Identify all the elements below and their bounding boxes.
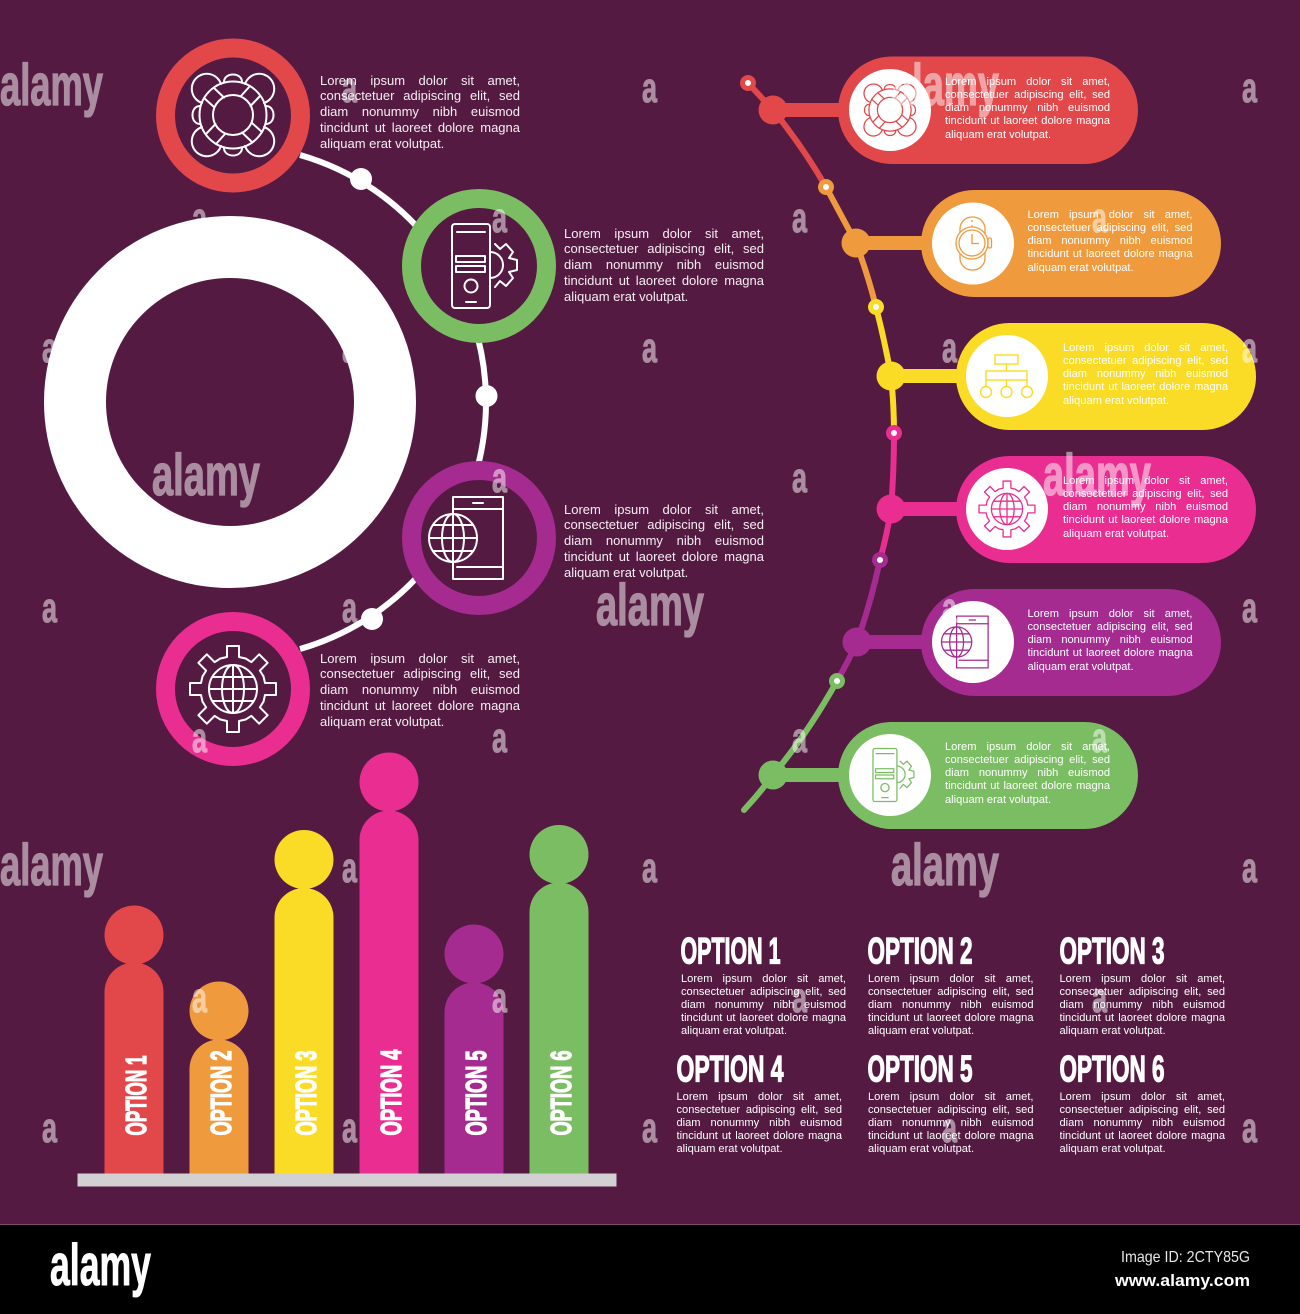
pill: pink: tincidunt ut laoreet dolore magna <box>1063 514 1228 526</box>
node: green computer ring <box>412 198 546 334</box>
pill: purple: tincidunt ut laoreet dolore magna <box>1028 647 1192 659</box>
option 4: OPTION 4 <box>676 1048 784 1090</box>
option 5: diam nonummy nibh euismod <box>868 1117 1034 1129</box>
text block: purple node: consectetuer adipiscing elit, sed <box>564 517 764 532</box>
bar: option 6: OPTION 6 <box>546 1050 578 1136</box>
option 3: Lorem ipsum dolor sit amet, <box>1060 972 1225 984</box>
pill: green: tincidunt ut laoreet dolore magna <box>945 780 1110 792</box>
icon: wristwatch <box>956 217 992 270</box>
pill: purple: diam nonummy nibh euismod <box>1028 634 1192 646</box>
watermark overlay: a <box>792 194 807 241</box>
website: www.alamy.com <box>1114 1271 1250 1290</box>
watermark overlay: a <box>342 844 357 891</box>
watermark overlay: a <box>942 1104 957 1151</box>
option 3: aliquam erat volutpat. <box>1060 1025 1166 1037</box>
watermark overlay: a <box>792 714 807 761</box>
option 6: aliquam erat volutpat. <box>1060 1143 1166 1155</box>
option 1: aliquam erat volutpat. <box>681 1025 787 1037</box>
pill: yellow: diam nonummy nibh euismod <box>1063 368 1228 380</box>
watermark overlay: alamy <box>1043 443 1151 508</box>
option 5: aliquam erat volutpat. <box>868 1143 974 1155</box>
watermark overlay: a <box>342 584 357 631</box>
text block: purple node: tincidunt ut laoreet dolore magna <box>564 549 764 564</box>
watermark overlay: a <box>192 974 207 1021</box>
option 1 <box>680 930 846 1040</box>
pill: orange: consectetuer adipiscing elit, sed <box>1028 222 1192 234</box>
option 1: consectetuer adipiscing elit, sed <box>681 986 846 998</box>
watermark overlay: alamy <box>152 443 260 508</box>
pill: green: aliquam erat volutpat. <box>945 794 1051 806</box>
watermark overlay: a <box>192 194 207 241</box>
watermark overlay: a <box>492 194 507 241</box>
text block: pink node: consectetuer adipiscing elit, sed <box>320 666 520 681</box>
watermark overlay: a <box>192 714 207 761</box>
pill: pink: Lorem ipsum dolor sit amet, <box>1063 474 1228 486</box>
footer logo: alamy <box>50 1233 151 1298</box>
bar: option 1: OPTION 1 <box>121 1056 153 1136</box>
pill: green: consectetuer adipiscing elit, sed <box>945 754 1110 766</box>
watermark overlay: a <box>1092 194 1107 241</box>
option 1: Lorem ipsum dolor sit amet, <box>681 972 846 984</box>
connector arc with dots <box>300 155 498 649</box>
watermark overlay: a <box>492 454 507 501</box>
watermark overlay: a <box>492 714 507 761</box>
text block: purple node: aliquam erat volutpat. <box>564 564 688 580</box>
large white ring <box>75 247 385 557</box>
watermark overlay: a <box>1242 324 1257 371</box>
pill: orange <box>842 190 1221 297</box>
text block: red node: tincidunt ut laoreet dolore magna <box>320 120 520 135</box>
pill: red: consectetuer adipiscing elit, sed <box>945 89 1110 101</box>
option 5: tincidunt ut laoreet dolore magna <box>868 1130 1034 1142</box>
option 3: diam nonummy nibh euismod <box>1060 999 1225 1011</box>
pill: red: aliquam erat volutpat. <box>945 129 1051 141</box>
watermark overlay: a <box>1242 64 1257 111</box>
pill: yellow: aliquam erat volutpat. <box>1063 395 1169 407</box>
watermark overlay: a <box>1242 584 1257 631</box>
pill: green <box>758 722 1138 829</box>
option 2: tincidunt ut laoreet dolore magna <box>868 1012 1034 1024</box>
watermark overlay: alamy <box>0 53 103 118</box>
watermark overlay: a <box>42 1104 57 1151</box>
text block: red node: consectetuer adipiscing elit, sed <box>320 88 520 103</box>
watermark overlay: a <box>42 584 57 631</box>
option 2: Lorem ipsum dolor sit amet, <box>868 972 1034 984</box>
option 5: Lorem ipsum dolor sit amet, <box>868 1090 1034 1102</box>
pill: purple <box>842 589 1221 696</box>
node: pink gear globe ring <box>166 622 300 756</box>
panel: curved timeline with pills <box>742 56 1256 829</box>
watermark overlay: a <box>942 584 957 631</box>
text block: pink node: tincidunt ut laoreet dolore magna <box>320 698 520 713</box>
pill: yellow: tincidunt ut laoreet dolore magna <box>1063 381 1228 393</box>
watermark overlay: a <box>492 974 507 1021</box>
text block: green node: tincidunt ut laoreet dolore magna <box>564 273 764 288</box>
node: purple phone globe ring <box>412 470 546 606</box>
pill: purple: aliquam erat volutpat. <box>1028 661 1134 673</box>
pill: green: diam nonummy nibh euismod <box>945 767 1110 779</box>
option 3: OPTION 3 <box>1060 930 1164 972</box>
bar: option 2 <box>190 982 248 1174</box>
bar: option 3 <box>274 830 334 1174</box>
text block: red node <box>320 72 520 152</box>
text block: green node: diam nonummy nibh euismod <box>564 257 764 272</box>
pill: orange: diam nonummy nibh euismod <box>1028 235 1192 247</box>
timeline spine <box>744 83 894 810</box>
option 2: diam nonummy nibh euismod <box>868 999 1034 1011</box>
text block: red node: diam nonummy nibh euismod <box>320 104 520 119</box>
watermark overlay: alamy <box>891 53 999 118</box>
watermark overlay: a <box>642 64 657 111</box>
text block: green node: aliquam erat volutpat. <box>564 288 688 304</box>
text block: red node: aliquam erat volutpat. <box>320 136 444 150</box>
bar chart <box>78 752 616 1186</box>
bar: option 5: OPTION 5 <box>461 1050 493 1136</box>
watermark overlay: a <box>642 324 657 371</box>
bar: option 4 <box>360 752 418 1174</box>
watermark overlay: a <box>1242 1104 1257 1151</box>
option 6 <box>1060 1048 1225 1158</box>
option 5 <box>868 1048 1034 1158</box>
pill: pink: consectetuer adipiscing elit, sed <box>1063 488 1228 500</box>
option 5: consectetuer adipiscing elit, sed <box>868 1104 1034 1116</box>
pill: yellow: Lorem ipsum dolor sit amet, <box>1063 342 1228 354</box>
bar: option 4: OPTION 4 <box>376 1050 408 1136</box>
watermark overlay: a <box>792 454 807 501</box>
option 6: OPTION 6 <box>1060 1048 1164 1090</box>
option 4: tincidunt ut laoreet dolore magna <box>676 1130 842 1142</box>
watermark overlay: a <box>1242 844 1257 891</box>
watermark overlay: a <box>1092 714 1107 761</box>
watermark overlay: a <box>642 844 657 891</box>
pill: yellow <box>876 323 1256 430</box>
watermark overlay: alamy <box>891 833 999 898</box>
pill: purple: Lorem ipsum dolor sit amet, <box>1028 608 1192 620</box>
option 1: diam nonummy nibh euismod <box>681 999 846 1011</box>
pill: purple: consectetuer adipiscing elit, sed <box>1028 621 1192 633</box>
option 4: Lorem ipsum dolor sit amet, <box>676 1090 842 1102</box>
option 4: diam nonummy nibh euismod <box>676 1117 842 1129</box>
watermark overlay: alamy <box>596 573 704 638</box>
option 2 <box>868 930 1034 1040</box>
pill: red: Lorem ipsum dolor sit amet, <box>945 76 1110 88</box>
option 5: OPTION 5 <box>868 1048 972 1090</box>
option 2: OPTION 2 <box>868 930 972 972</box>
pill: orange: aliquam erat volutpat. <box>1028 262 1134 274</box>
bar: option 5 <box>444 924 504 1174</box>
image id: Image ID: 2CTY85G <box>1121 1249 1250 1266</box>
option 4: aliquam erat volutpat. <box>676 1143 783 1155</box>
text block: pink node: diam nonummy nibh euismod <box>320 682 520 697</box>
text block: purple node: Lorem ipsum dolor sit amet, <box>564 502 764 516</box>
option 4 <box>676 1048 842 1158</box>
text block: purple node <box>564 502 764 582</box>
panel: circular process diagram <box>75 48 764 756</box>
bar: option 1 <box>104 906 164 1174</box>
text block: green node <box>564 226 764 306</box>
pill: orange: Lorem ipsum dolor sit amet, <box>1028 208 1192 220</box>
text block: red node: Lorem ipsum dolor sit amet, <box>320 72 520 88</box>
bar: option 2: OPTION 2 <box>206 1050 238 1136</box>
text block: pink node <box>320 650 520 730</box>
text block: pink node: Lorem ipsum dolor sit amet, <box>320 650 520 666</box>
pill: pink <box>876 456 1256 563</box>
bar: option 3: OPTION 3 <box>291 1050 323 1136</box>
text block: green node: consectetuer adipiscing elit, sed <box>564 241 764 256</box>
pill: green: Lorem ipsum dolor sit amet, <box>945 740 1110 752</box>
watermark overlay: a <box>792 974 807 1021</box>
pill: yellow: consectetuer adipiscing elit, sed <box>1063 355 1228 367</box>
timeline small nodes <box>742 78 900 686</box>
option 3: tincidunt ut laoreet dolore magna <box>1060 1012 1225 1024</box>
option 6: Lorem ipsum dolor sit amet, <box>1060 1090 1225 1102</box>
panel: option descriptions <box>676 930 1225 1158</box>
watermark overlay: a <box>342 324 357 371</box>
footer bar <box>0 1224 1300 1314</box>
option 3: consectetuer adipiscing elit, sed <box>1060 986 1225 998</box>
watermark overlay: alamy <box>0 833 103 898</box>
watermark overlay: a <box>42 324 57 371</box>
option 2: aliquam erat volutpat. <box>868 1025 974 1037</box>
watermark overlay: a <box>642 1104 657 1151</box>
watermark overlay: a <box>1092 974 1107 1021</box>
chart baseline <box>78 1174 616 1186</box>
text block: pink node: aliquam erat volutpat. <box>320 714 444 728</box>
text block: green node: Lorem ipsum dolor sit amet, <box>564 226 764 240</box>
pill: orange: tincidunt ut laoreet dolore magna <box>1028 248 1192 260</box>
option 4: consectetuer adipiscing elit, sed <box>676 1104 842 1116</box>
pill: red: tincidunt ut laoreet dolore magna <box>945 115 1110 127</box>
option 1: tincidunt ut laoreet dolore magna <box>681 1012 846 1024</box>
option 2: consectetuer adipiscing elit, sed <box>868 986 1034 998</box>
icon: organisation chart <box>980 355 1032 398</box>
node: red lifebuoy ring <box>166 48 300 183</box>
option 6: tincidunt ut laoreet dolore magna <box>1060 1130 1225 1142</box>
pill: pink: diam nonummy nibh euismod <box>1063 501 1228 513</box>
watermark overlay: a <box>942 324 957 371</box>
pill: red: diam nonummy nibh euismod <box>945 102 1110 114</box>
pill: pink: aliquam erat volutpat. <box>1063 528 1169 540</box>
option 1: OPTION 1 <box>680 930 780 972</box>
text block: purple node: diam nonummy nibh euismod <box>564 533 764 548</box>
pill: red <box>758 56 1138 164</box>
option 3 <box>1060 930 1225 1040</box>
option 6: diam nonummy nibh euismod <box>1060 1117 1225 1129</box>
option 6: consectetuer adipiscing elit, sed <box>1060 1104 1225 1116</box>
watermark overlay: a <box>342 64 357 111</box>
bar: option 6 <box>530 825 588 1174</box>
watermark overlay: a <box>342 1104 357 1151</box>
